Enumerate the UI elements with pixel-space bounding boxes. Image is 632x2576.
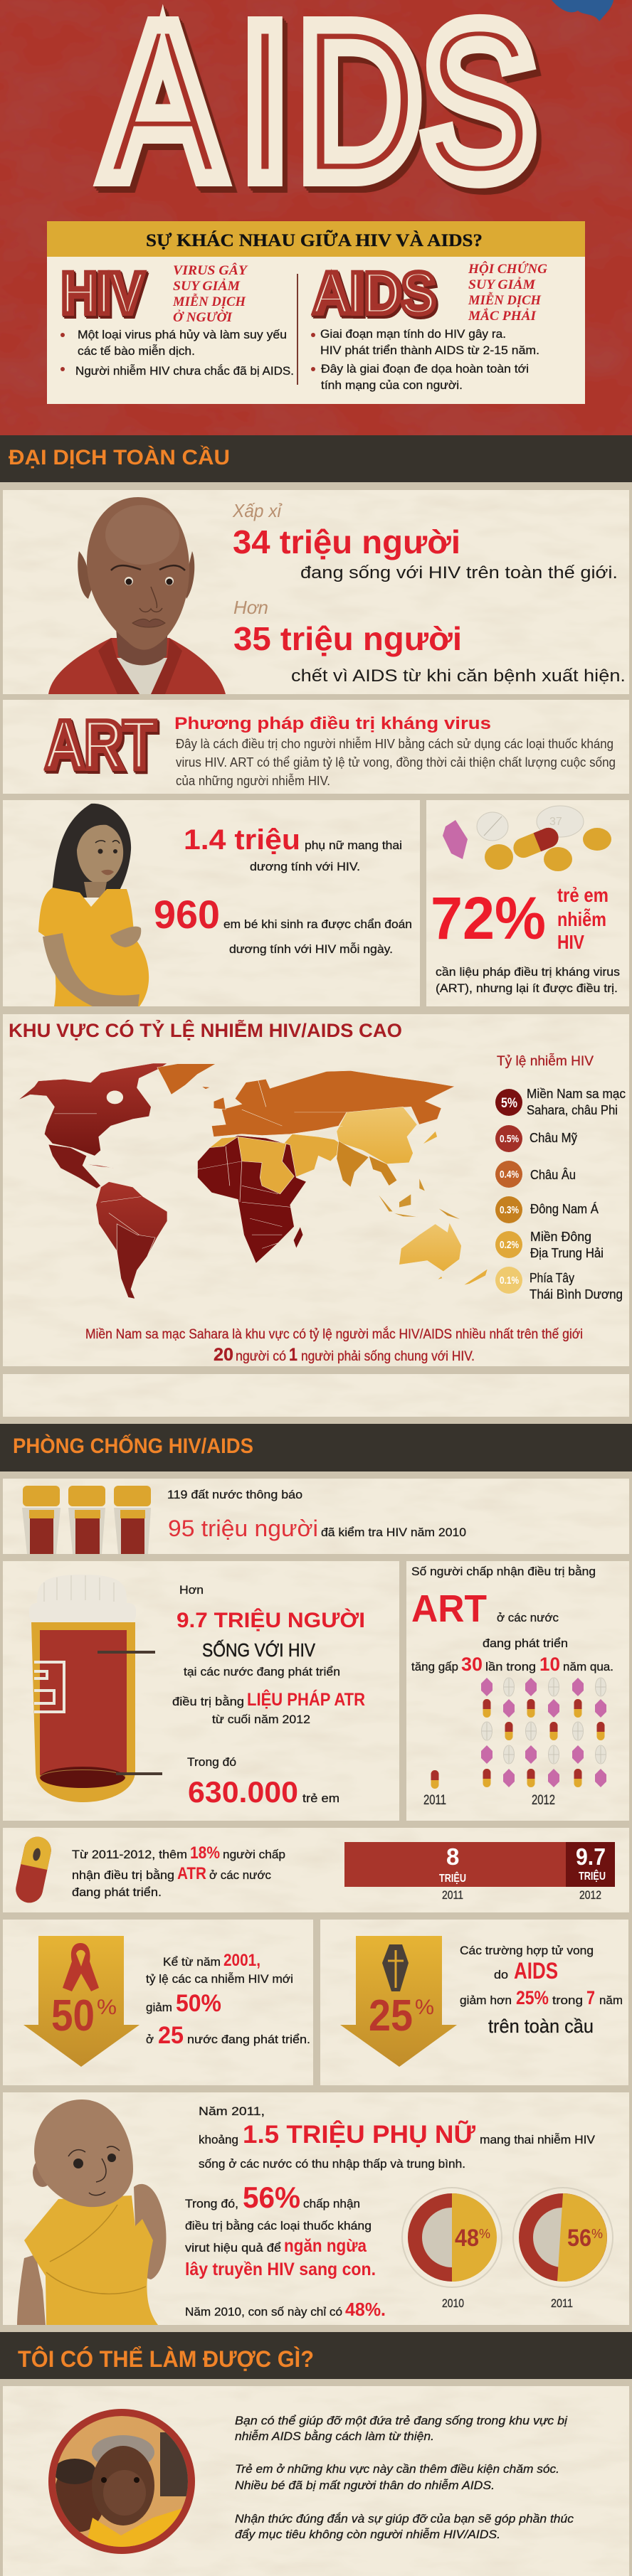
ART heading: Phương pháp điều trị kháng virus (174, 714, 491, 733)
stat: 1.5 million women: Năm 2011, (199, 2104, 265, 2118)
world map (18, 1063, 488, 1299)
stat: ART growth (411, 1565, 613, 1675)
bar chart: 2011 vs 2012 (344, 1842, 615, 1902)
section bar: global epidemic (0, 435, 632, 482)
hero background (0, 0, 632, 435)
aids definition: HỘI CHỨNG (468, 261, 547, 277)
stat: 960 babies: dương tính với HIV mỗi ngày. (229, 942, 393, 956)
legend: 0.3%: Đông Nam Á (530, 1202, 599, 1216)
stat: 9.7 million: 9.7 TRIỆU NGƯỜI (177, 1608, 365, 1632)
illustration: man (48, 497, 226, 694)
stat: 56% treated: virut hiệu quả để (185, 2241, 281, 2255)
ART description: virus HIV. ART có thể giảm tỷ lệ tử vong, đồng thời cải thiện chất lượng cuộc sống (176, 755, 616, 770)
bar chart: 2011 vs 2012: 2012 (579, 1888, 601, 1902)
stat: 9.7 million: điều trị bằng (172, 1695, 244, 1708)
legend: 0.5% (495, 1125, 577, 1152)
illustration: pregnant woman (38, 804, 149, 1006)
stat: 50% fewer infections: 25 (158, 2022, 184, 2049)
stat: ART growth: ở các nước (497, 1611, 559, 1624)
stat: 18% increase: nhận điều trị bằng (72, 1868, 174, 1882)
stat: 9.7 million: từ cuối năm 2012 (212, 1713, 310, 1726)
aids bullets: tính mạng của con người. (321, 378, 463, 392)
stat: 95 million tested: 95 triệu người (168, 1516, 318, 1541)
legend: 0.1%: Thái Bình Dương (530, 1287, 623, 1302)
legend: 0.5%: Châu Mỹ (530, 1131, 577, 1145)
icon: coffin (382, 1944, 409, 1991)
call to action text: Nhiều bé đã bị mất người thân do nhiễm AIDS. (235, 2479, 495, 2492)
stat: 25% fewer deaths: AIDS (514, 1958, 558, 1984)
donut chart 2010: 48 (455, 2225, 479, 2252)
stat: 35 million dead: chết vì AIDS từ khi căn bệnh xuất hiện. (291, 666, 626, 686)
stat: ART growth: đang phát triển (483, 1636, 568, 1650)
section bar: what can I do (0, 2332, 632, 2379)
aids definition: MẮC PHẢI (468, 308, 537, 324)
callout lines (98, 1652, 162, 1774)
stat: 50% fewer infections: 50% (176, 1990, 221, 2017)
logo: ART: ART (46, 707, 156, 783)
bar chart: 2011 vs 2012: 2011 (442, 1888, 463, 1902)
donut chart 2011: 56 (567, 2225, 591, 2252)
panel: ART (46, 707, 616, 788)
hiv definition (172, 262, 248, 325)
legend: 5% (495, 1087, 626, 1117)
call to action text: Trẻ em ở những khu vực này cần thêm điều kiện chăm sóc. (235, 2462, 559, 2476)
legend: 0.3%: 0.3% (500, 1204, 519, 1216)
stat: 95 million tested (167, 1488, 466, 1541)
stat: 56% treated: ngăn ngừa (284, 2236, 367, 2256)
legend: 0.2% (495, 1230, 604, 1260)
stat: ART growth: lần trong (485, 1660, 536, 1673)
call to action text (235, 2414, 574, 2541)
stat: 56% treated (185, 2181, 386, 2320)
stat: 34 million living: Xấp xỉ (232, 500, 283, 521)
logo: AIDS: AIDS (313, 261, 436, 326)
section bar: prevention: PHÒNG CHỐNG HIV/AIDS (13, 1434, 253, 1458)
stat: 56% treated: lây truyền HIV sang con. (185, 2260, 376, 2279)
map note: Miền Nam sa mạc Sahara là khu vực có tỷ lệ người mắc HIV/AIDS nhiều nhất trên thế giới (85, 1326, 583, 1342)
stat: 630,000 children: 630.000 (188, 1775, 298, 1809)
heading band (47, 221, 585, 257)
stat: 72% children: trẻ em (557, 884, 609, 906)
stat: 72% children: nhiễm (557, 908, 606, 930)
section bar: global epidemic: ĐẠI DỊCH TOÀN CẦU (9, 445, 230, 469)
stat: 25% fewer deaths: trong (552, 1994, 583, 2007)
stat: 9.7 million (172, 1583, 365, 1726)
heading: SỰ KHÁC NHAU GIỮA HIV VÀ AIDS? (146, 230, 483, 250)
logo: HIV: HIV (61, 261, 144, 326)
legend: 5%: 5% (501, 1096, 517, 1111)
aids definition: MIỄN DỊCH (468, 292, 542, 308)
stat: 72% children: HIV (557, 931, 584, 953)
stat: 34 million living: đang sống với HIV trên toàn thế giới. (300, 563, 618, 582)
aids bullets: Giai đoạn mạn tính do HIV gây ra. (320, 327, 506, 341)
stat: ART growth: 30 (461, 1654, 483, 1675)
hiv definition: VIRUS GÂY (173, 262, 248, 278)
aids bullets: HIV phát triển thành AIDS từ 2-15 năm. (320, 344, 539, 357)
donut chart 2011: 2011 (551, 2296, 573, 2310)
stat: 18% increase: ở các nước (209, 1868, 271, 1882)
arrow: 25% down: 25 (369, 1991, 413, 2040)
stat: 35 million dead: 35 triệu người (233, 620, 462, 657)
stat: 25% fewer deaths: do (494, 1968, 508, 1981)
stat: 9.7 million: tại các nước đang phát triển (184, 1665, 340, 1678)
stat: 18% increase: người chấp (223, 1848, 285, 1861)
stat: 56% treated: 56% (243, 2181, 300, 2214)
stat: ART growth: năm qua. (563, 1660, 613, 1673)
bar chart: 2011 vs 2012: 9.7 (576, 1843, 606, 1870)
stat: 50% fewer infections: nước đang phát triển. (187, 2033, 310, 2046)
donut chart 2010 (402, 2188, 502, 2310)
call to action text: nhiễm AIDS bằng cách làm từ thiện. (235, 2429, 434, 2443)
photo: children (48, 2409, 199, 2554)
stat: 35 million dead: Hơn (233, 597, 268, 618)
stat: 1.4 million pregnant (184, 824, 402, 873)
legend: 5%: Miền Nam sa mạc (527, 1087, 626, 1101)
call to action text: Nhận thức đúng đắn và sự giúp đỡ của bạn sẽ góp phần thúc (235, 2512, 574, 2526)
map note: 20 (214, 1345, 233, 1365)
stat: 960 babies: em bé khi sinh ra được chẩn đoán (223, 917, 412, 931)
stat: 72% children: 72% (431, 885, 546, 952)
stat: 34 million living (232, 500, 618, 582)
stat: 72% children (431, 884, 620, 995)
legend: 0.5%: 0.5% (500, 1133, 519, 1145)
map note: 1 (289, 1345, 297, 1365)
donut chart 2010: % (479, 2227, 490, 2241)
hiv bullets (60, 328, 294, 378)
legend: 5%: Sahara, châu Phi (527, 1103, 618, 1117)
stat: 50% fewer infections: tỷ lệ các ca nhiễm HIV mới (146, 1972, 293, 1986)
legend (495, 1053, 626, 1302)
stat: 9.7 million: LIỆU PHÁP ATR (247, 1688, 365, 1710)
stat: 630,000 children: trẻ em (302, 1792, 339, 1805)
legend: 0.2%: 0.2% (500, 1239, 519, 1251)
stat: 50% fewer infections: Kể từ năm (163, 1955, 221, 1969)
donut chart 2010: 2010 (442, 2296, 464, 2310)
call to action text: đẩy mục tiêu không còn người nhiễm HIV/AIDS. (235, 2528, 500, 2541)
arrow: 50% down (23, 1936, 139, 2067)
aids definition: SUY GIẢM (468, 277, 536, 292)
bar chart: 2011 vs 2012: TRIỆU (439, 1871, 466, 1885)
aids definition (468, 261, 547, 324)
stat: 25% fewer deaths: trên toàn cầu (488, 2016, 594, 2037)
stat: 18% increase (72, 1843, 285, 1899)
stat: 1.5 million women: 1.5 TRIỆU PHỤ NỮ (243, 2120, 476, 2149)
hiv bullets: Một loại virus phá hủy và làm suy yếu (78, 328, 287, 341)
stat: ART growth: Số người chấp nhận điều trị bằng (411, 1565, 596, 1578)
stat: 72% children: cần liệu pháp điều trị kháng virus (436, 965, 620, 979)
stat: 95 million tested: 119 đất nước thông báo (167, 1488, 302, 1501)
pill chart: 2012 (532, 1793, 555, 1808)
legend: 0.4%: 0.4% (500, 1169, 519, 1181)
aids bullets: Đây là giai đoạn đe dọa hoàn toàn tới (321, 362, 529, 376)
illustration: pills (443, 806, 611, 871)
donut chart 2011: % (591, 2227, 603, 2241)
stat: 630,000 children: Trong đó (187, 1755, 236, 1769)
ART description: Đây là cách điều trị cho người nhiễm HIV bằng cách sử dụng các loại thuốc kháng (176, 736, 613, 751)
hiv bullets: Người nhiễm HIV chưa chắc đã bị AIDS. (75, 364, 294, 378)
stat: ART growth: tăng gấp (411, 1660, 458, 1673)
stat: 25% fewer deaths: 7 (586, 1987, 595, 2008)
stat: 56% treated: 48%. (345, 2299, 386, 2320)
stat: 1.5 million women: khoảng (199, 2133, 238, 2146)
stat: 1.4 million pregnant: phụ nữ mang thai (305, 839, 402, 852)
ink splash (552, 0, 613, 21)
stat: 1.5 million women: mang thai nhiễm HIV (480, 2133, 596, 2146)
stat: 1.5 million women (199, 2104, 596, 2171)
legend: 0.2%: Miền Đông (530, 1230, 591, 1244)
illustration: blood tubes (22, 1486, 151, 1554)
stat: 9.7 million: Hơn (179, 1583, 204, 1597)
panel: hiv vs aids (47, 221, 585, 404)
hiv definition: SUY GIẢM (173, 279, 241, 294)
stat: 56% treated: Năm 2010, con số này chỉ có (185, 2305, 342, 2319)
stat: 1.4 million pregnant: 1.4 triệu (184, 824, 300, 856)
hiv definition: Ở NGƯỜI (173, 309, 233, 325)
arrow: 50% down: 50 (51, 1991, 95, 2040)
illustration: child (17, 2099, 167, 2325)
stat: 1.4 million pregnant: dương tính với HIV. (250, 860, 360, 873)
stat: 56% treated: chấp nhận (303, 2197, 360, 2210)
arrow: 25% down: % (415, 1996, 434, 2019)
bar chart: 2011 vs 2012: TRIỆU (579, 1869, 606, 1883)
legend: 0.3% (495, 1196, 599, 1223)
stat: 50% fewer infections: giảm (146, 2001, 172, 2014)
legend title: Tỷ lệ nhiễm HIV (497, 1053, 594, 1069)
stat: 56% treated: Trong đó, (185, 2197, 238, 2210)
stat: 25% fewer deaths: giảm hơn (460, 1994, 512, 2007)
stat: 34 million living: 34 triệu người (233, 523, 460, 560)
pill chart (423, 1678, 606, 1808)
stat: 56% treated: điều trị bằng các loại thuốc kháng (185, 2219, 372, 2232)
donut chart 2011 (513, 2188, 613, 2310)
ART description: của những người nhiễm HIV. (176, 773, 330, 788)
stat: 25% fewer deaths: 25% (516, 1987, 549, 2008)
stat: 25% fewer deaths (460, 1944, 623, 2037)
stat: 25% fewer deaths: Các trường hợp tử vong (460, 1944, 594, 1957)
stat: 35 million dead (233, 597, 626, 686)
map note: người phải sống chung với HIV. (301, 1349, 475, 1364)
legend: 0.1%: Phía Tây (530, 1271, 574, 1285)
arrow: 50% down: % (97, 1996, 117, 2019)
stat: 72% children: (ART), nhưng lại ít được điều trị. (436, 981, 618, 995)
pill chart: 2011 (423, 1793, 446, 1808)
legend: 0.1%: 0.1% (500, 1274, 519, 1287)
logo: AIDS: AIDS (313, 261, 436, 326)
legend: 0.1% (495, 1267, 623, 1302)
stat: 50% fewer infections: 2001, (223, 1951, 260, 1970)
panel body (47, 256, 585, 404)
section bar: prevention (0, 1424, 632, 1471)
hiv bullets: các tế bào miễn dịch. (78, 344, 195, 358)
stat: 9.7 million: SỐNG VỚI HIV (202, 1639, 316, 1661)
icon: capsule (14, 1834, 53, 1905)
map note: người có (236, 1349, 286, 1364)
stat: 25% fewer deaths: năm (599, 1994, 623, 2007)
stat: ART growth: 10 (539, 1654, 560, 1675)
map heading: KHU VỰC CÓ TỶ LỆ NHIỄM HIV/AIDS CAO (9, 1018, 402, 1041)
call to action text: Bạn có thể giúp đỡ một đứa trẻ đang sống trong khu vực bị (235, 2414, 568, 2427)
map note (85, 1326, 583, 1365)
stat: 95 million tested: đã kiểm tra HIV năm 2010 (321, 1526, 466, 1539)
legend: 0.4%: Châu Âu (530, 1168, 576, 1182)
bar chart: 2011 vs 2012: 8 (446, 1843, 459, 1870)
stat: 50% fewer infections (146, 1951, 310, 2049)
stat: 18% increase: ATR (177, 1864, 206, 1883)
aids bullets (311, 327, 539, 392)
logo: HIV: HIV (61, 261, 144, 326)
logo: ART: ART (46, 707, 156, 783)
stat: ART growth: ART (411, 1587, 487, 1630)
stat: 18% increase: Từ 2011-2012, thêm (72, 1848, 187, 1861)
arrow: 25% down (340, 1936, 457, 2067)
stat: 960 babies (154, 892, 412, 956)
icon: ribbon (63, 1943, 99, 1991)
illustration: medicine bottle (29, 1575, 136, 1802)
stat: 18% increase: đang phát triển. (72, 1885, 162, 1899)
stat: 18% increase: 18% (190, 1843, 220, 1863)
illustration: pills: 37 (549, 816, 562, 828)
ART description (176, 736, 616, 788)
section bar: what can I do: TÔI CÓ THỂ LÀM ĐƯỢC GÌ? (18, 2346, 314, 2372)
stat: 1.5 million women: sống ở các nước có thu nhập thấp và trung bình. (199, 2157, 465, 2171)
stat: 630,000 children (187, 1755, 339, 1809)
legend: 0.4% (495, 1161, 576, 1188)
legend: 0.2%: Địa Trung Hải (530, 1246, 604, 1260)
stat: 960 babies: 960 (154, 892, 220, 937)
hiv definition: MIỄN DỊCH (172, 294, 246, 309)
stat: 50% fewer infections: ở (146, 2033, 154, 2046)
